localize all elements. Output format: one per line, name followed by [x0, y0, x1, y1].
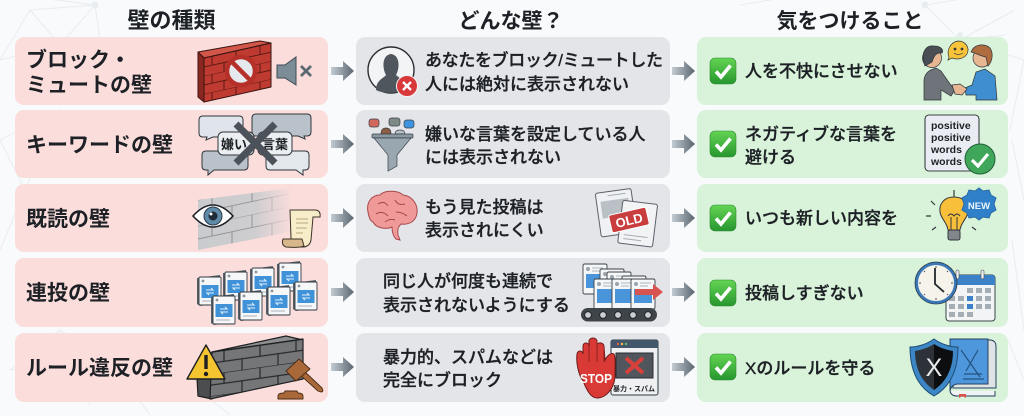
panel: 既読説明: 表示されにくい: [425, 221, 544, 240]
panel: 投稿しすぎない: 投稿しすぎない: [745, 284, 864, 303]
panel: ネガティブな言葉を避ける: ネガティブな言葉を: [745, 124, 897, 144]
panel: ルール違反説明: 完全にブロック: [383, 370, 502, 390]
icon: positive words card: words: [930, 156, 962, 168]
icon: check: [710, 280, 736, 306]
icon: crossed out speech bubbles: [199, 114, 311, 175]
panel: ブロック説明: あなたをブロック/ミュートした: [425, 50, 663, 70]
panel: ネガティブな言葉を避ける: [697, 110, 1008, 178]
icon: conveyor belt of posts: [581, 264, 663, 322]
arrow: [672, 282, 695, 302]
icon: brain: [368, 191, 417, 240]
icon: muted speaker: [277, 57, 311, 85]
panel: 連投説明: [356, 258, 670, 327]
panel: いつも新しい内容を: いつも新しい内容を: [745, 209, 898, 228]
panel: ネガティブな言葉を避ける: 避ける: [745, 148, 796, 167]
panel: ブロック説明: 人には絶対に表示されない: [425, 75, 629, 94]
icon: blocked user: [368, 47, 418, 96]
panel: ルール違反の壁: ルール違反の壁: [26, 357, 173, 380]
panel: ブロック説明: [356, 37, 670, 105]
icon: check: [710, 354, 736, 380]
icon: calendar and clock: [915, 262, 995, 321]
arrow: [672, 134, 695, 154]
arrow: [672, 357, 695, 377]
arrow: [331, 208, 354, 228]
panel: 既読の壁: 既読の壁: [26, 208, 110, 231]
panel: ルール違反説明: [356, 333, 670, 402]
panel: ブロック・ミュートの壁: [15, 37, 328, 105]
icon: check: [710, 205, 736, 231]
icon: light bulb with new badge: [926, 188, 996, 240]
icon: positive words card: words: [930, 144, 962, 156]
icon: fading wall with eye: [193, 186, 294, 252]
arrow: [331, 282, 354, 302]
arrow: [672, 61, 695, 81]
icon: stop hand: STOP: [580, 372, 612, 386]
icon: positive words card: positive: [931, 132, 971, 144]
panel: ブロック・ミュートの壁: ミュートの壁: [26, 74, 152, 97]
heading: どんな壁？: どんな壁？: [458, 10, 564, 33]
icon: stop hand: [577, 338, 615, 398]
icon: X shield: X: [926, 354, 943, 382]
icon: rule book: [950, 339, 996, 398]
panel: Xのルールを守る: Xのルールを守る: [745, 359, 875, 378]
panel: 連投説明: 同じ人が何度も連続で: [383, 271, 553, 291]
icon: light bulb with new badge: NEW: [968, 201, 990, 212]
icon: browser with blocked content: [611, 340, 658, 395]
arrow: [331, 357, 354, 377]
panel: ブロック・ミュートの壁: ブロック・: [26, 48, 131, 72]
heading: 壁の種類: 壁の種類: [127, 8, 216, 33]
arrow: [672, 208, 695, 228]
panel: キーワード説明: には表示されない: [425, 148, 561, 167]
panel: 連投の壁: [15, 258, 328, 327]
panel: 連投の壁: 連投の壁: [26, 282, 110, 305]
icon: brick wall with no sign: [198, 41, 271, 102]
icon: X shield: [910, 339, 958, 396]
icon: check: [710, 58, 736, 84]
panel: ルール違反説明: 暴力的、スパムなどは: [383, 348, 553, 367]
panel: キーワードの壁: キーワードの壁: [26, 134, 173, 157]
panel: 既読説明: もう見た投稿は: [425, 198, 544, 217]
icon: grey wall with warning and gavel: [187, 336, 323, 399]
heading: 気をつけること: 気をつけること: [776, 10, 924, 33]
panel: 人を不快にさせない: [697, 37, 1008, 105]
panel: 連投説明: 表示されないようにする: [383, 296, 570, 315]
icon: positive words card: [925, 115, 995, 174]
panel: 既読説明: [356, 184, 670, 252]
panel: 人を不快にさせない: 人を不快にさせない: [745, 62, 898, 81]
panel: キーワードの壁: [15, 110, 328, 178]
panel: いつも新しい内容を: [697, 184, 1008, 252]
icon: funnel: [369, 118, 414, 171]
panel: Xのルールを守る: [697, 333, 1008, 402]
arrow: [331, 61, 354, 81]
icon: positive words card: positive: [931, 120, 971, 132]
panel: ルール違反の壁: [15, 333, 328, 402]
icon: old posts: [595, 188, 658, 247]
panel: 投稿しすぎない: [697, 258, 1008, 327]
icon: crossed out speech bubbles: 嫌い: [221, 137, 247, 152]
icon: stack of repeated posts: [197, 261, 317, 325]
panel: キーワード説明: 嫌いな言葉を設定している人: [425, 125, 646, 144]
icon: old posts: OLD: [614, 210, 644, 231]
arrow: [331, 134, 354, 154]
icon: check: [710, 131, 736, 157]
icon: handshake: [922, 41, 997, 100]
icon: browser with blocked content: 暴力・スパム: [613, 384, 655, 393]
icon: scroll: [282, 210, 320, 247]
icon: crossed out speech bubbles: 言葉: [262, 137, 288, 152]
panel: 既読の壁: [15, 184, 328, 252]
panel: キーワード説明: [356, 110, 670, 178]
